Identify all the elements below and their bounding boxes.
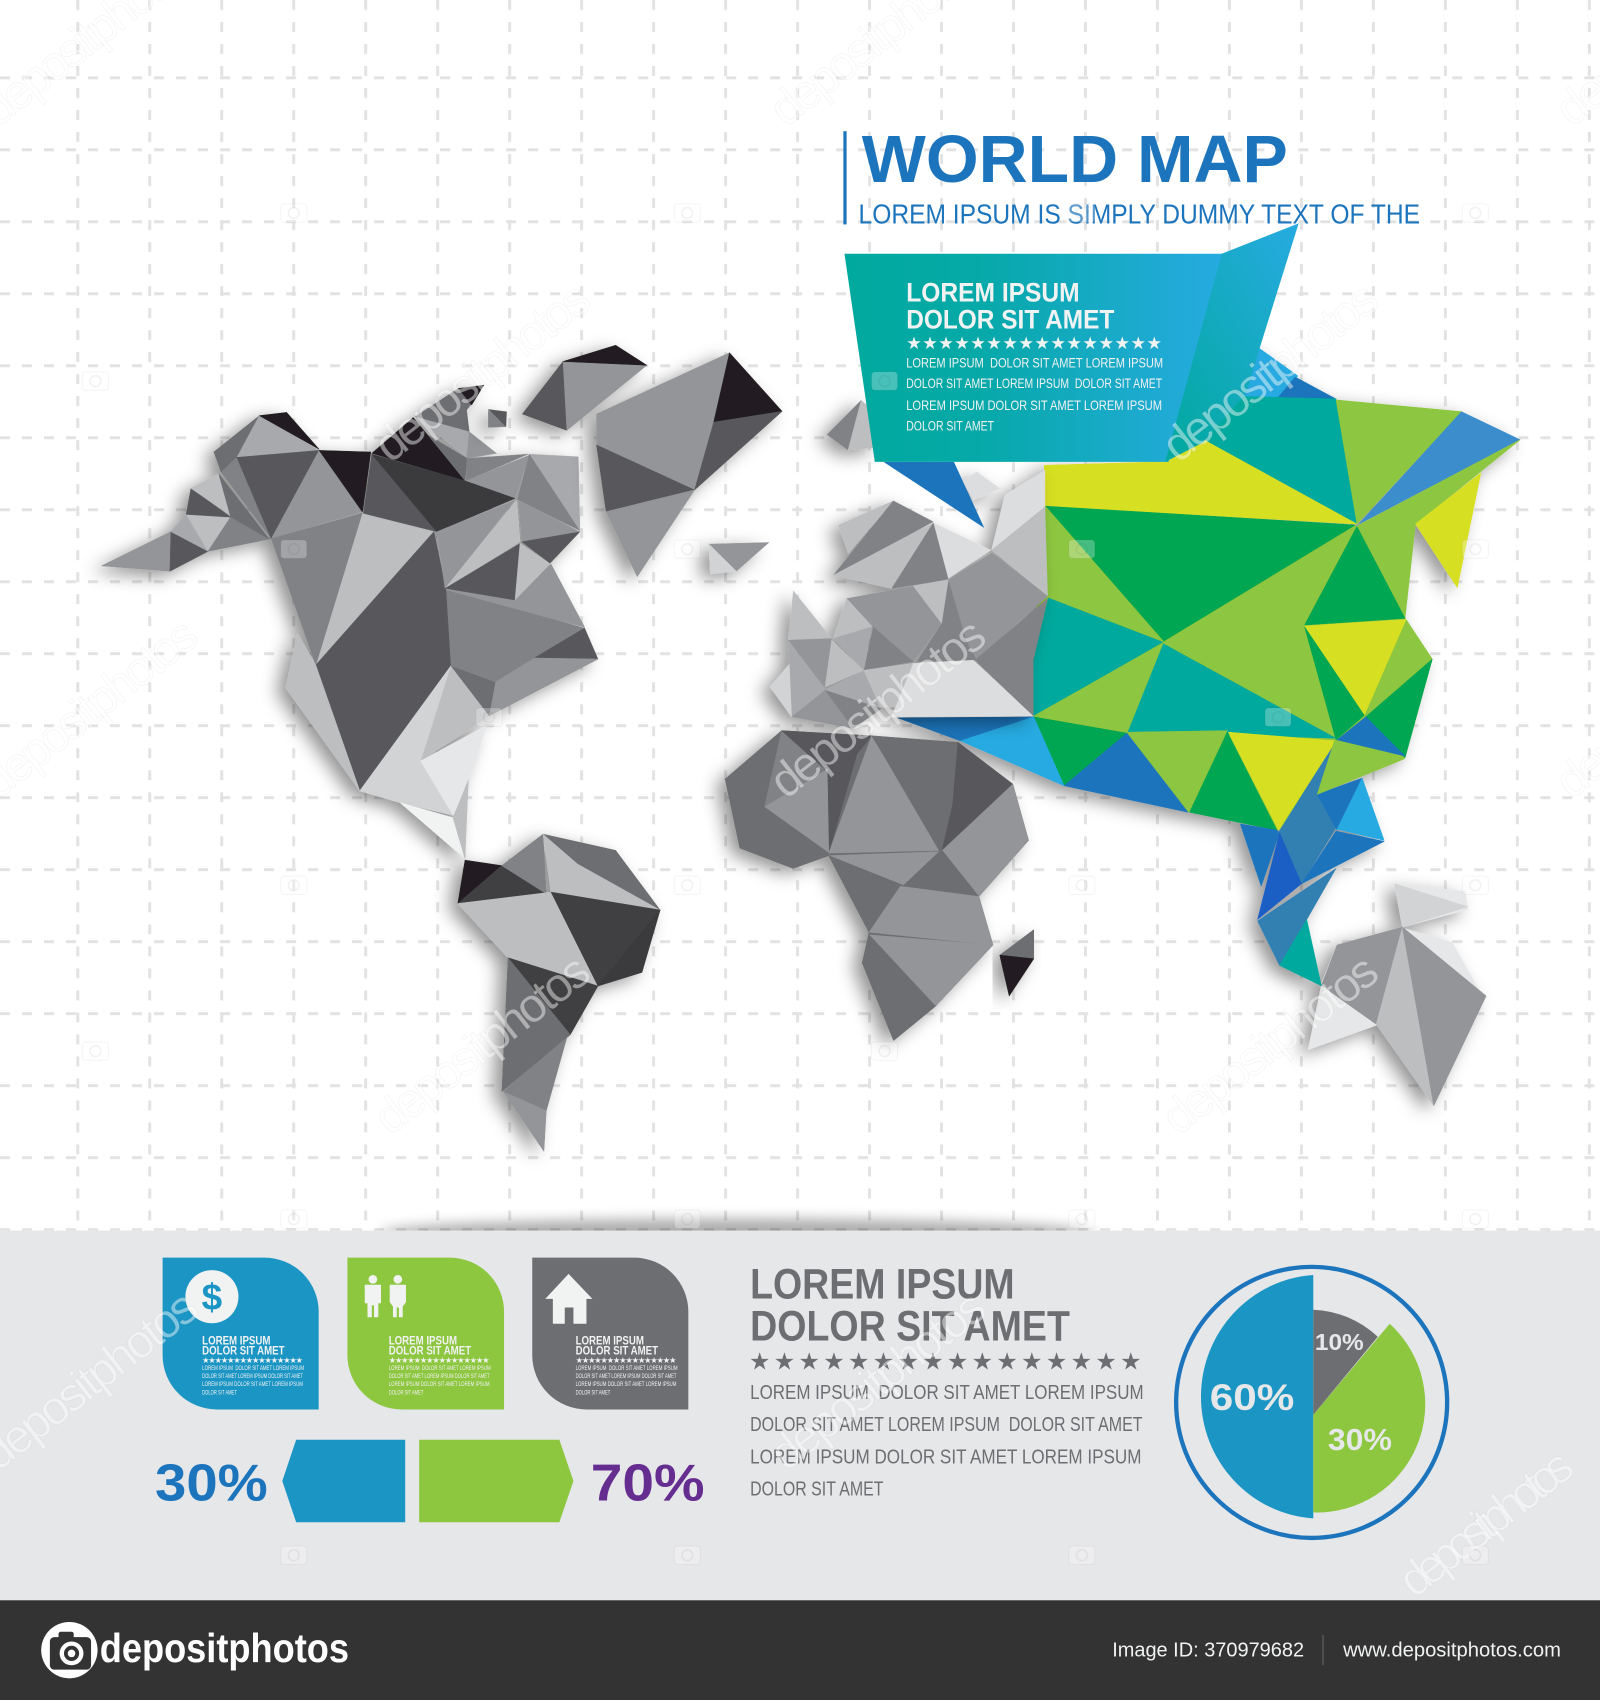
watermarks: depositphotos (760, 1280, 996, 1481)
stars: ★★★★★★★★★★★★★★★★ (749, 1347, 1141, 1375)
icon: people (365, 1275, 406, 1317)
card: people (347, 1258, 504, 1409)
card text: LOREM IPSUM (202, 1333, 271, 1347)
card text: ★★★★★★★★★★★★★★★★ (389, 1355, 490, 1365)
banner body (844, 254, 1225, 462)
text block (749, 1260, 1144, 1501)
continent: Australia (1308, 884, 1486, 1106)
card text: LOREM IPSUM DOLOR SIT AMET LOREM IPSUM (576, 1382, 676, 1388)
island: Madagascar (1000, 930, 1034, 996)
watermarks: depositphotos (760, 608, 996, 809)
continent: Arctic islands and Greenland (488, 345, 782, 577)
label: 10%: 10% (1315, 1329, 1364, 1355)
card text: LOREM IPSUM DOLOR SIT AMET LOREM IPSUM (389, 1382, 490, 1388)
slice: 10% (1313, 1310, 1378, 1415)
watermarks: depositphotos (1152, 944, 1388, 1145)
body text: DOLOR SIT AMET LOREM IPSUM DOLOR SIT AMET (750, 1414, 1143, 1436)
card text (202, 1333, 304, 1396)
banner heading: LOREM IPSUM (906, 276, 1080, 307)
bottom panel (0, 1231, 1600, 1600)
card text: DOLOR SIT AMET LOREM IPSUM DOLOR SIT AMET (389, 1374, 490, 1380)
label: 60%: 60% (1210, 1377, 1294, 1418)
card: finance (163, 1258, 319, 1409)
banner body text: LOREM IPSUM DOLOR SIT AMET LOREM IPSUM (906, 398, 1162, 413)
watermarks: depositphotos (1389, 1439, 1584, 1608)
watermarks: depositphotos (364, 944, 600, 1145)
world map (102, 345, 1520, 1151)
heading (750, 1260, 1070, 1350)
card text (389, 1333, 491, 1396)
slice: 60% (1201, 1275, 1313, 1518)
card text: DOLOR SIT AMET (576, 1390, 611, 1396)
card text: ★★★★★★★★★★★★★★★★ (576, 1355, 676, 1365)
card text: DOLOR SIT AMET LOREM IPSUM DOLOR SIT AMET (576, 1374, 677, 1380)
banner body text: LOREM IPSUM DOLOR SIT AMET LOREM IPSUM (906, 356, 1163, 371)
banner body text: DOLOR SIT AMET (906, 418, 994, 433)
card text: LOREM IPSUM DOLOR SIT AMET LOREM IPSUM (202, 1382, 303, 1388)
banner stars: ★★★★★★★★★★★★★★★★ (906, 334, 1162, 354)
continent: Europe and western Asia (770, 400, 1048, 729)
subtitle: LOREM IPSUM IS SIMPLY DUMMY TEXT OF THE (859, 197, 1420, 229)
logo mark (41, 1622, 98, 1678)
highlighted region: Asia (898, 348, 1520, 986)
continent: North America (102, 385, 598, 859)
bar: 30% (282, 1440, 405, 1522)
card text: LOREM IPSUM (576, 1333, 644, 1347)
image id: Image ID: 370979682 (1112, 1639, 1304, 1662)
body text: LOREM IPSUM DOLOR SIT AMET LOREM IPSUM (750, 1447, 1141, 1469)
footer bar (0, 1600, 1600, 1700)
outer ring (1176, 1267, 1447, 1538)
continent: Africa (725, 731, 1029, 1040)
banner body text: DOLOR SIT AMET LOREM IPSUM DOLOR SIT AMET (906, 376, 1162, 391)
logo wordmark: depositphotos (100, 1625, 349, 1671)
bar: 70% (419, 1440, 573, 1522)
title block (843, 122, 1420, 229)
banner body text (906, 356, 1163, 433)
heading: LOREM IPSUM (750, 1260, 1015, 1307)
banner tail (883, 462, 984, 528)
card text: LOREM IPSUM DOLOR SIT AMET LOREM IPSUM (389, 1366, 491, 1372)
body text: DOLOR SIT AMET (750, 1479, 883, 1501)
pie chart (1176, 1267, 1447, 1538)
watermarks: depositphotos (1152, 272, 1388, 473)
card text: LOREM IPSUM (389, 1333, 457, 1347)
card text: ★★★★★★★★★★★★★★★★ (202, 1355, 303, 1365)
card text: LOREM IPSUM DOLOR SIT AMET LOREM IPSUM (576, 1366, 678, 1372)
label: 30%: 30% (1328, 1424, 1392, 1457)
title: WORLD MAP (862, 122, 1288, 197)
banner fold (1165, 223, 1299, 462)
continent: South America (458, 834, 660, 1151)
slice: 30% (1313, 1324, 1425, 1512)
card text: LOREM IPSUM DOLOR SIT AMET LOREM IPSUM (202, 1366, 304, 1372)
panel shadow (379, 1219, 1095, 1247)
card text: DOLOR SIT AMET (202, 1390, 237, 1396)
value: 70%: 70% (591, 1455, 705, 1513)
logo (41, 1622, 349, 1678)
callout banner (844, 223, 1299, 528)
card text: DOLOR SIT AMET (576, 1344, 659, 1358)
card text: DOLOR SIT AMET (202, 1344, 285, 1358)
card text: DOLOR SIT AMET (389, 1344, 472, 1358)
body text (750, 1382, 1144, 1501)
website: www.depositphotos.com (1342, 1639, 1561, 1662)
percentage comparison bars (155, 1440, 705, 1522)
icon: dollar coin (185, 1270, 238, 1323)
icon: house (545, 1274, 592, 1324)
watermarks: depositphotos (364, 272, 600, 473)
icon: dollar coin: $ (202, 1277, 222, 1318)
heading: DOLOR SIT AMET (750, 1303, 1070, 1350)
card: housing (532, 1258, 688, 1409)
value: 30%: 30% (155, 1455, 268, 1513)
card text: DOLOR SIT AMET (389, 1390, 424, 1396)
title rule (843, 131, 847, 224)
card text (576, 1333, 678, 1396)
body text: LOREM IPSUM DOLOR SIT AMET LOREM IPSUM (750, 1382, 1144, 1404)
card text: DOLOR SIT AMET LOREM IPSUM DOLOR SIT AMET (202, 1374, 303, 1380)
callout banner: DOLOR SIT AMET (906, 304, 1115, 335)
